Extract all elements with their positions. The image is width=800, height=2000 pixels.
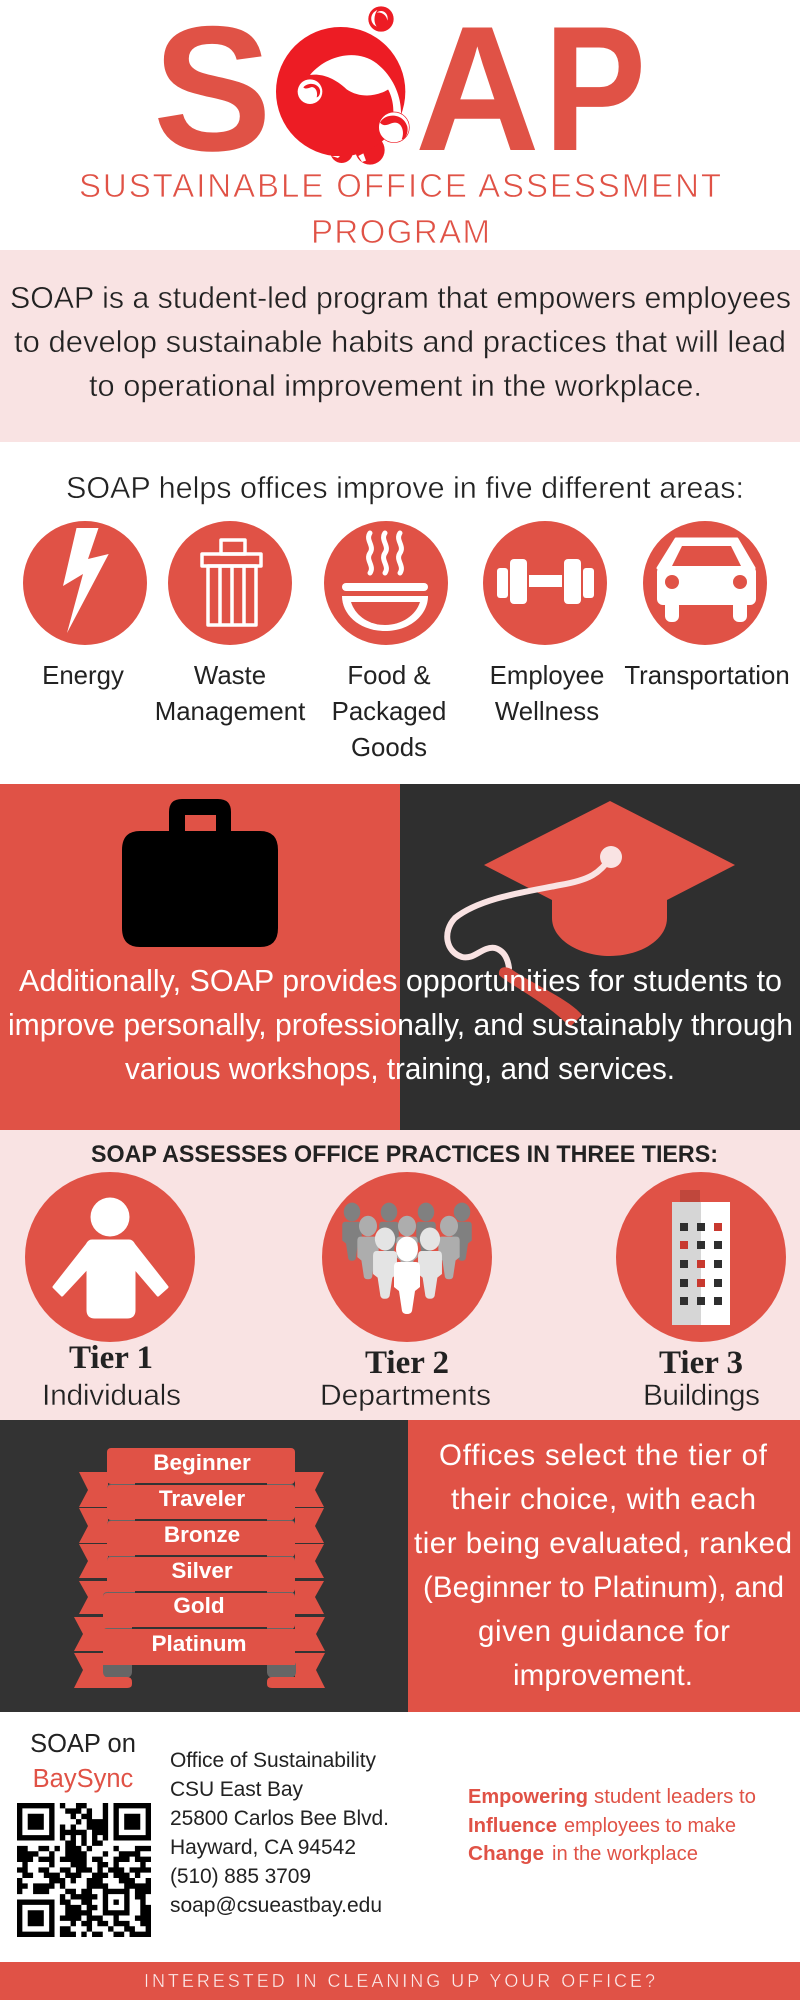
icon: transportation xyxy=(643,521,767,645)
tier 3: Buildings xyxy=(643,1379,760,1412)
evaluation text: (Beginner to Platinum), and xyxy=(423,1571,784,1604)
opportunities text xyxy=(8,964,793,1086)
icon: briefcase xyxy=(122,799,278,947)
footer: tagline: Influence xyxy=(468,1815,557,1837)
panel: three tiers xyxy=(0,1130,800,1420)
heading: five areas: SOAP helps offices improve in five different areas: xyxy=(66,470,744,505)
ribbon labels: Beginner xyxy=(153,1450,251,1475)
area labels: Waste xyxy=(194,662,266,690)
intro text: to develop sustainable habits and practices that will lead xyxy=(14,324,786,359)
footer: address xyxy=(170,1749,389,1917)
footer: address: Office of Sustainability xyxy=(170,1749,376,1772)
footer: BaySync: BaySync xyxy=(33,1765,134,1793)
tier 2: Departments xyxy=(320,1379,491,1412)
area labels: Employee xyxy=(490,662,604,690)
icon: graduation cap xyxy=(447,801,735,1027)
footer: tagline xyxy=(468,1786,756,1865)
area labels: Goods xyxy=(351,734,427,762)
area labels: Energy xyxy=(42,662,124,690)
footer: address: soap@csueastbay.edu xyxy=(170,1894,382,1917)
footer: tagline: employees to make xyxy=(564,1815,736,1837)
area labels: Transportation xyxy=(624,662,790,690)
ribbon labels: Gold xyxy=(173,1593,225,1618)
panel: ranking ribbon xyxy=(0,1420,408,1712)
evaluation text: tier being evaluated, ranked xyxy=(414,1527,792,1560)
evaluation text: given guidance for xyxy=(478,1615,730,1648)
intro text xyxy=(10,280,791,403)
tiers heading: SOAP ASSESSES OFFICE PRACTICES IN THREE TIERS: xyxy=(91,1141,718,1168)
ribbon labels: Bronze xyxy=(164,1522,240,1547)
QR code xyxy=(17,1803,151,1937)
icon: wellness xyxy=(483,521,607,645)
footer: address: CSU East Bay xyxy=(170,1778,304,1801)
footer: tagline: Empowering xyxy=(468,1786,588,1808)
area labels: Management xyxy=(155,698,305,726)
footer band: call to action xyxy=(0,1962,800,2000)
intro text: SOAP is a student-led program that empowers employees xyxy=(10,280,791,315)
evaluation text: their choice, with each xyxy=(451,1483,756,1516)
evaluation text: Offices select the tier of xyxy=(439,1439,768,1472)
icon: energy xyxy=(23,521,147,645)
tier 1 xyxy=(25,1172,195,1412)
footer: address: (510) 885 3709 xyxy=(170,1865,311,1888)
icon: food xyxy=(324,521,448,645)
panel: intro band xyxy=(0,250,800,442)
tier 1: Tier 1 xyxy=(69,1340,153,1376)
tier 1: Individuals xyxy=(42,1379,181,1412)
tier 3: Tier 3 xyxy=(659,1345,743,1381)
tier 3 xyxy=(616,1172,786,1412)
opportunities text: improve personally, professionally, and sustainably through xyxy=(8,1008,793,1042)
footer: tagline: in the workplace xyxy=(552,1843,698,1865)
ribbon labels: Silver xyxy=(171,1558,233,1583)
ribbon labels: Traveler xyxy=(159,1486,245,1511)
subtitle: PROGRAM xyxy=(311,213,490,250)
panel: tier evaluation xyxy=(408,1420,800,1712)
footer: tagline: student leaders to xyxy=(594,1786,756,1808)
opportunities text: Additionally, SOAP provides opportunities for students to xyxy=(19,964,782,998)
opportunities text: various workshops, training, and services. xyxy=(125,1052,675,1086)
footer: tagline: Change xyxy=(468,1843,544,1865)
area labels: Wellness xyxy=(495,698,599,726)
footer: BaySync xyxy=(30,1730,136,1793)
footer: BaySync: SOAP on xyxy=(30,1730,136,1758)
area labels: Packaged xyxy=(332,698,446,726)
ribbon labels: Platinum xyxy=(151,1631,247,1656)
area labels: Food & xyxy=(347,662,431,690)
intro text: to operational improvement in the workplace. xyxy=(89,368,702,403)
footer: address: Hayward, CA 94542 xyxy=(170,1836,356,1859)
area labels xyxy=(42,662,790,762)
tier 2: Tier 2 xyxy=(365,1345,449,1381)
subtitle: SUSTAINABLE OFFICE ASSESSMENT xyxy=(79,167,721,204)
evaluation text: improvement. xyxy=(513,1659,693,1692)
icon: waste xyxy=(168,521,292,645)
panel: student opportunities xyxy=(0,784,800,1130)
subtitle xyxy=(79,167,721,250)
ribbon labels xyxy=(151,1450,251,1656)
tier 2 xyxy=(320,1172,492,1412)
title: SOAP logo xyxy=(153,0,646,189)
evaluation text xyxy=(414,1439,792,1692)
footer: address: 25800 Carlos Bee Blvd. xyxy=(170,1807,389,1830)
footer band: call to action: INTERESTED IN CLEANING UP YOUR OFFICE? xyxy=(144,1971,655,1991)
